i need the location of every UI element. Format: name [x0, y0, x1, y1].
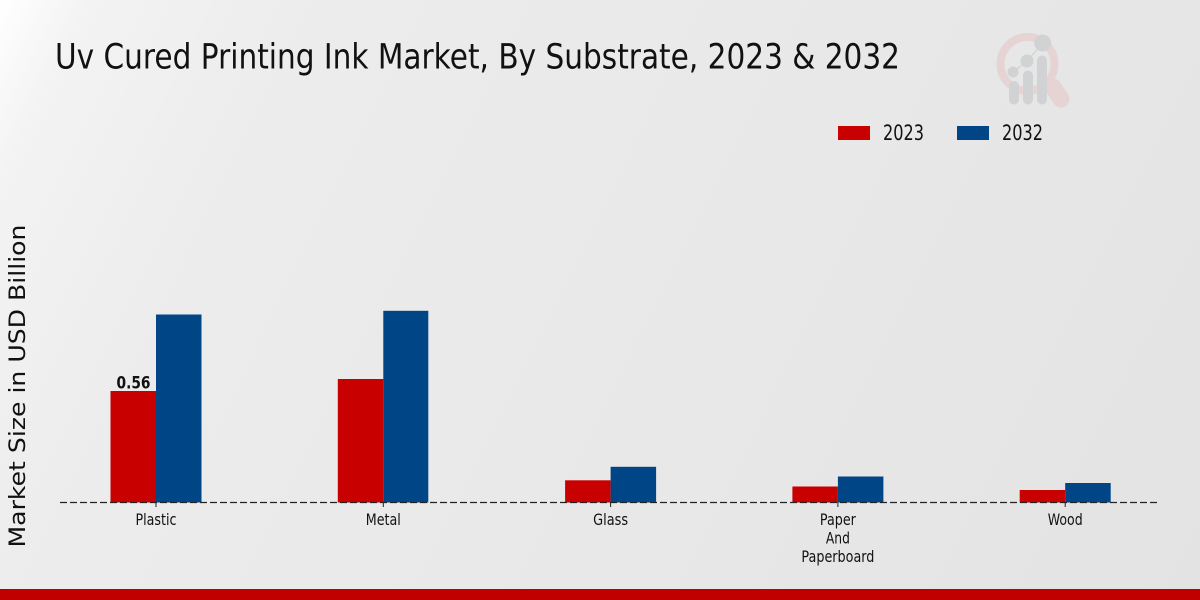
title: Uv Cured Printing Ink Market, By Substrate, 2023 & 2032: [55, 38, 900, 78]
group: Wood: [1020, 483, 1111, 502]
y axis label: Market Size in USD Billion: [5, 224, 31, 548]
category labels: [136, 510, 1083, 566]
label: Plastic: Plastic: [136, 510, 176, 529]
legend item: 2023: [838, 121, 924, 145]
group: Metal: [338, 311, 428, 502]
legend item: 2023: 2023: [883, 121, 924, 145]
group: Plastic: [110, 314, 202, 502]
icon: magnifier logo watermark: [1000, 34, 1061, 104]
label: Paper And Paperboard: Paper: [820, 510, 856, 529]
footer bar: [0, 589, 1200, 600]
legend item: 2032: 2032: [1002, 121, 1043, 145]
label: Paper And Paperboard: Paperboard: [801, 547, 874, 566]
bar chart: [60, 311, 1160, 507]
legend: [838, 121, 1043, 145]
group: Glass: [565, 467, 656, 502]
label: Wood: Wood: [1048, 510, 1083, 529]
x axis baseline: [60, 502, 1160, 504]
value label: 0.56: [116, 373, 150, 393]
label: Paper And Paperboard: [801, 510, 874, 566]
legend item: 2032: [957, 121, 1043, 145]
group: Paper And Paperboard: [792, 476, 883, 502]
label: Glass: Glass: [593, 510, 628, 529]
label: Paper And Paperboard: And: [826, 528, 850, 548]
label: Metal: Metal: [366, 510, 401, 529]
